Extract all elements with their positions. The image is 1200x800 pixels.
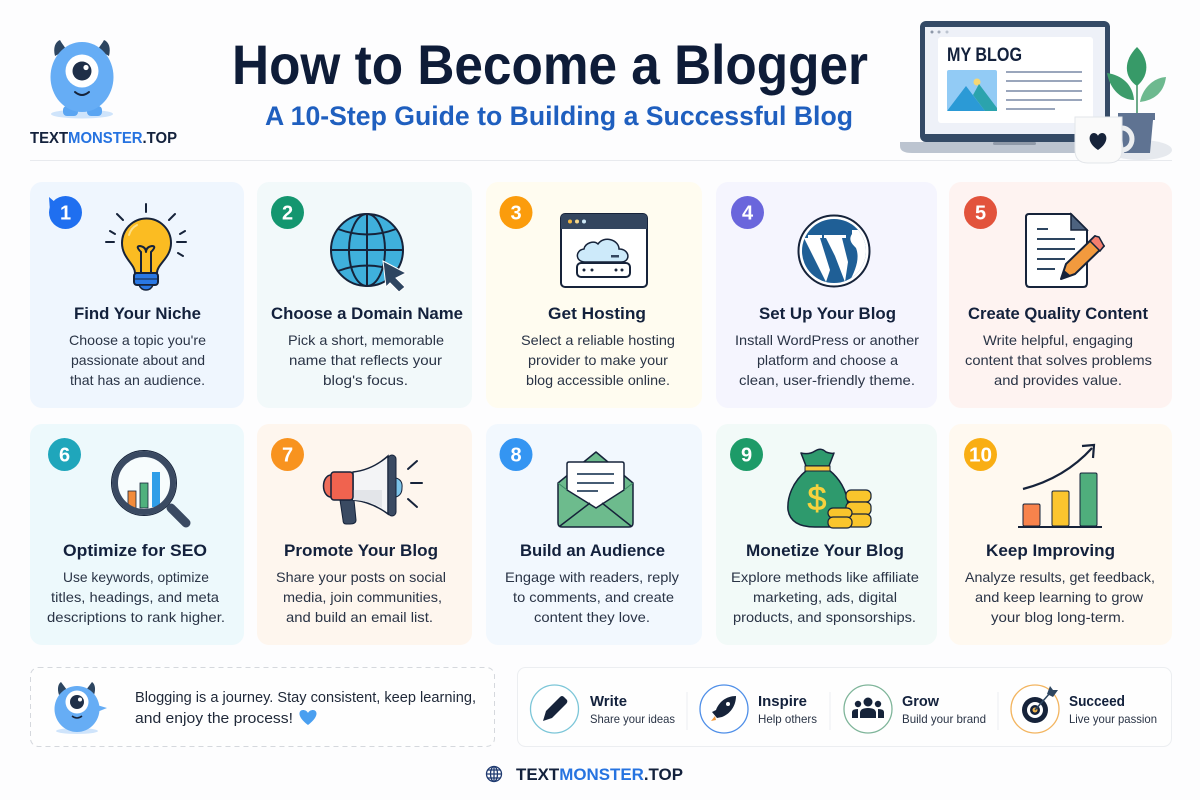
step badge 3: 3 (510, 202, 522, 224)
card text: to comments, and create (513, 589, 674, 605)
item: Grow (844, 685, 986, 733)
icon: small monster mascot (54, 682, 107, 734)
title: How to Become a Blogger (232, 33, 868, 96)
card text: your blog long-term. (991, 609, 1125, 625)
card text: Create Quality Content (968, 304, 1148, 323)
step badge 10 (964, 438, 997, 471)
icon: money bag and coins (788, 449, 871, 528)
card text: Set Up Your Blog (759, 304, 896, 323)
step badge 10: 10 (969, 444, 992, 466)
card 8: Build an Audience (486, 424, 702, 645)
item: Succeed: Live your passion (1069, 712, 1157, 726)
card 3: Get Hosting (486, 182, 702, 408)
icon: rising bar chart with arrow (1018, 445, 1102, 527)
item: Inspire: Help others (758, 712, 817, 726)
step badge 1 (49, 196, 82, 229)
step badge 3 (500, 196, 532, 229)
panel: encouragement callout: Blogging is a journey. Stay consistent, keep learning, (135, 690, 476, 706)
step badge 7 (271, 438, 304, 471)
card text: Select a reliable hosting (521, 332, 675, 348)
step badge 5: 5 (975, 202, 986, 224)
card text: name that reflects your (289, 352, 442, 368)
card text: Monetize Your Blog (746, 541, 904, 560)
icon: browser window with cloud server (561, 214, 647, 287)
card text: Explore methods like affiliate (731, 569, 919, 585)
card text (276, 541, 446, 625)
card text (731, 541, 919, 625)
card text (505, 541, 679, 625)
card text: Choose a topic you're (69, 332, 206, 348)
card 9: Monetize Your Blog (716, 424, 937, 645)
icon: megaphone (324, 455, 422, 524)
step badge 5 (964, 196, 997, 229)
card 4: Set Up Your Blog (731, 196, 919, 388)
item: Write: Share your ideas (590, 712, 675, 726)
step badge 7: 7 (282, 444, 293, 466)
card text: Build an Audience (520, 541, 665, 560)
card text: Engage with readers, reply (505, 569, 679, 585)
step badge 1: 1 (60, 202, 71, 224)
card text: Share your posts on social (276, 569, 446, 585)
step badge 4: 4 (742, 202, 754, 224)
card text: content that solves problems (965, 352, 1152, 368)
card text (965, 541, 1155, 625)
item: Succeed (1011, 685, 1157, 733)
illustration: laptop, plant and mug: MY BLOG (947, 45, 1022, 66)
card 5: Create Quality Content (949, 182, 1172, 408)
icon: blue heart (299, 710, 317, 725)
card text: Analyze results, get feedback, (965, 569, 1155, 585)
icon: open envelope with letter (558, 452, 633, 527)
card 2: Choose a Domain Name (257, 182, 472, 408)
card text: Find Your Niche (74, 304, 201, 323)
card text: blog's focus. (323, 372, 408, 388)
step badge 9: 9 (741, 444, 752, 466)
item: Grow: Build your brand (902, 712, 986, 726)
icon: globe with cursor (331, 214, 406, 292)
card text: media, join communities, (283, 589, 442, 605)
card 1: Find Your Niche (30, 182, 244, 408)
card text: and build an email list. (286, 609, 433, 625)
card 10: Keep Improving (949, 424, 1172, 645)
step badge 2 (271, 196, 304, 229)
card text (69, 304, 206, 388)
card text: descriptions to rank higher. (47, 609, 225, 625)
step badge 9 (730, 438, 763, 471)
card text (271, 304, 463, 388)
card text: Use keywords, optimize (63, 569, 209, 585)
card 7: Promote Your Blog (257, 424, 472, 645)
item: Inspire: Inspire (758, 693, 807, 710)
card text: content they love. (534, 609, 650, 625)
card text: marketing, ads, digital (753, 589, 897, 605)
logo: monster mascot and brand: TEXTMONSTER.TOP (30, 130, 177, 147)
illustration: laptop, plant and mug (900, 21, 1172, 163)
card text: products, and sponsorships. (733, 609, 916, 625)
logo: monster mascot and brand (30, 40, 177, 147)
footer brand: TEXTMONSTER.TOP (516, 765, 683, 784)
item: Inspire (700, 685, 817, 733)
step badge 8 (500, 438, 532, 471)
item: Write (530, 685, 675, 733)
icon: money bag and coins: $ (808, 480, 827, 518)
card text: Install WordPress or another (735, 332, 919, 348)
card text: provider to make your (528, 352, 668, 368)
card text: Pick a short, memorable (288, 332, 444, 348)
subtitle: A 10-Step Guide to Building a Successful Blog (265, 101, 853, 131)
step badge 2: 2 (282, 202, 293, 224)
card text: Get Hosting (548, 304, 646, 323)
card text: that has an audience. (70, 372, 205, 388)
card text: Choose a Domain Name (271, 304, 463, 323)
card text: blog accessible online. (526, 372, 670, 388)
step badge 4 (731, 196, 764, 229)
card text (47, 541, 225, 625)
icon: document and pencil (1026, 214, 1104, 287)
card text: passionate about and (71, 352, 205, 368)
panel: encouragement callout (30, 668, 494, 746)
card text (965, 304, 1152, 388)
card text: and provides value. (994, 372, 1122, 388)
icon: magnifier with bar chart (112, 450, 186, 523)
step badge 8: 8 (510, 444, 522, 466)
card text: Optimize for SEO (63, 541, 207, 560)
card text (735, 304, 919, 388)
card text: Keep Improving (986, 541, 1115, 560)
icon: light bulb (106, 204, 186, 290)
card text: and keep learning to grow (975, 589, 1144, 605)
icon: WordPress logo (798, 216, 870, 286)
item: Grow: Grow (902, 693, 939, 710)
card 6: Optimize for SEO (30, 424, 244, 645)
step badge 6: 6 (59, 444, 70, 466)
card text: Promote Your Blog (284, 541, 438, 560)
item: Write: Write (590, 693, 627, 710)
icon: footer globe (486, 766, 502, 782)
card text: clean, user-friendly theme. (739, 372, 915, 388)
step badge 6 (48, 438, 81, 471)
card text: platform and choose a (757, 352, 898, 368)
card text (521, 304, 675, 388)
panel: encouragement callout: and enjoy the process! (135, 711, 293, 727)
card text: Write helpful, engaging (983, 332, 1133, 348)
panel: write, inspire, grow, succeed (518, 668, 1172, 746)
card text: titles, headings, and meta (51, 589, 219, 605)
item: Succeed: Succeed (1069, 693, 1125, 710)
